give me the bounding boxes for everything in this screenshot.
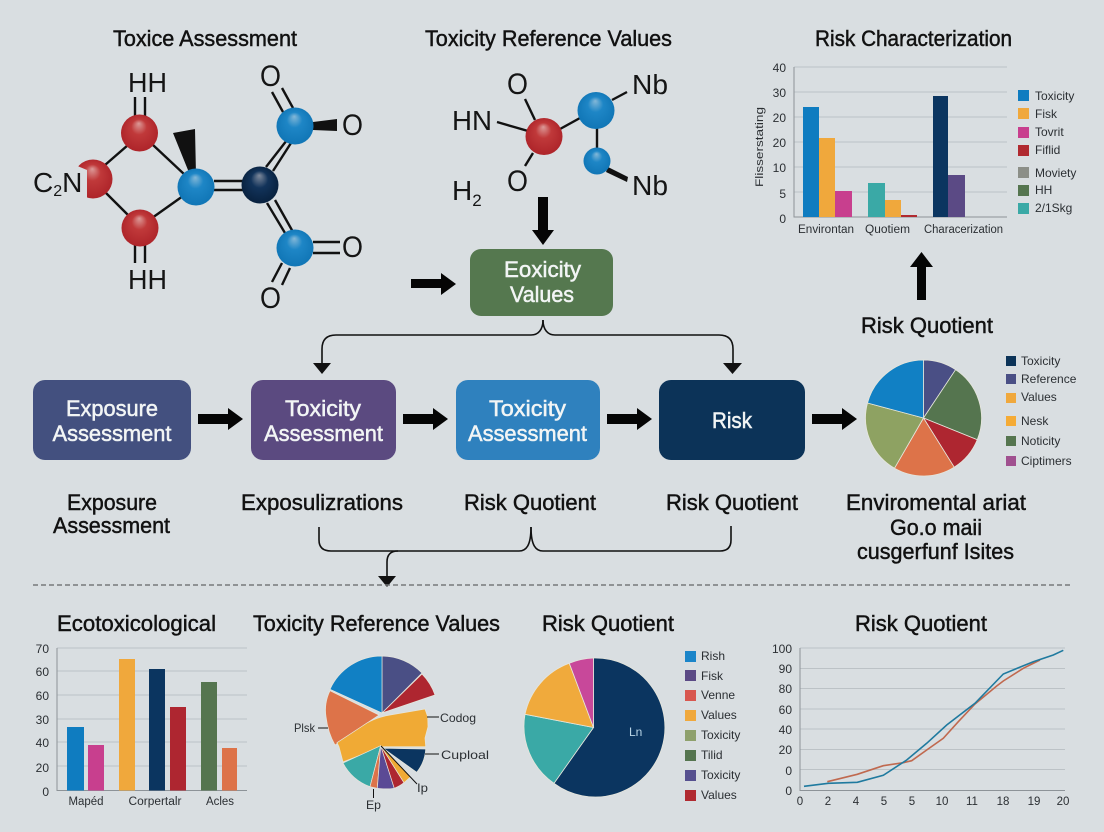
legend: Tovrit xyxy=(1035,125,1064,139)
label: Risk Quotient right: Risk Quotient xyxy=(666,490,798,515)
atom labels: O xyxy=(342,109,363,142)
arrow: into toxicity values xyxy=(411,273,456,295)
x axis labels: 5 xyxy=(909,796,915,808)
atom labels: O xyxy=(260,282,281,315)
x axis labels: 10 xyxy=(936,796,948,808)
label: Environmental sites: Go.o maii xyxy=(890,515,982,540)
y axis labels xyxy=(773,61,786,226)
box: Toxicity Values xyxy=(470,249,613,316)
legend xyxy=(1018,89,1076,215)
x axis labels: Mapéd xyxy=(68,796,104,808)
atom labels: 2 xyxy=(472,191,482,210)
heading: Toxice Assessment: Toxice Assessment xyxy=(113,26,297,51)
box: Toxicity Assessment blue: Toxicity xyxy=(489,396,566,421)
leader lines xyxy=(318,717,439,798)
y axis labels: 40 xyxy=(36,736,49,750)
connector: toxicity values to assessment and risk xyxy=(313,320,742,374)
legend: Ciptimers xyxy=(1021,454,1072,468)
arrow: toxicity to assessment xyxy=(403,408,448,430)
pie slices xyxy=(866,360,982,476)
arrow: up to bar chart xyxy=(910,252,933,300)
y axis labels: 0 xyxy=(785,764,792,778)
y axis labels: 60 xyxy=(779,703,792,717)
y axis labels: 90 xyxy=(779,662,792,676)
slice labels: Codog xyxy=(440,711,476,725)
box: Risk: Risk xyxy=(712,408,753,433)
box: Toxicity Values: Eoxicity xyxy=(504,257,581,282)
y axis labels: 20 xyxy=(773,136,786,150)
y axis labels: 40 xyxy=(779,723,792,737)
legend: 2/1Skg xyxy=(1035,201,1072,215)
x axis labels xyxy=(68,796,234,808)
box: Exposure Assessment: Exposure xyxy=(66,396,158,421)
arrow: molecule to toxicity values xyxy=(532,197,554,245)
red series xyxy=(827,660,1040,782)
slices xyxy=(524,658,665,797)
label: Exposure Assessment xyxy=(53,490,170,538)
heading: Risk Characterization: Risk Characterization xyxy=(815,26,1012,51)
atom labels: 2 xyxy=(53,183,62,200)
y axis labels: 10 xyxy=(773,161,786,175)
legend: Rish xyxy=(701,649,725,663)
atom labels: HN xyxy=(452,105,492,136)
atom labels: HH xyxy=(128,67,167,98)
box: Exposure Assessment xyxy=(33,380,191,460)
atom labels: N xyxy=(62,167,82,198)
atom labels: H xyxy=(452,175,472,206)
atom labels: O xyxy=(507,68,528,101)
arrow: risk to pie xyxy=(812,408,857,430)
axes xyxy=(794,67,1007,217)
legend: Values xyxy=(701,788,737,802)
label: Environmental sites xyxy=(846,490,1026,564)
label: Exposure Assessment: Assessment xyxy=(53,513,170,538)
connector: lower bracket xyxy=(319,526,731,587)
y axis labels: 30 xyxy=(773,86,786,100)
pie chart: right xyxy=(866,354,1077,476)
box: Toxicity Assessment purple: Assessment xyxy=(264,421,383,446)
molecule diagram left xyxy=(33,60,363,315)
slice labels: Cuploal xyxy=(441,748,489,762)
axes xyxy=(800,648,1065,790)
legend: Toxicity xyxy=(701,768,740,782)
heading: Risk Quotient lower centre: Risk Quotient xyxy=(542,611,674,636)
x axis labels: 2 xyxy=(825,796,831,808)
divider xyxy=(33,584,1071,586)
axes xyxy=(57,648,247,790)
arrow: assessment to risk xyxy=(607,408,652,430)
x axis labels: Quotiem xyxy=(865,224,910,236)
x axis labels: Acles xyxy=(206,796,234,808)
box: Exposure Assessment: Assessment xyxy=(52,421,172,446)
legend: Nesk xyxy=(1021,414,1049,428)
legend: Moviety xyxy=(1035,166,1076,180)
slice labels: Ep xyxy=(366,798,381,812)
box: Toxicity Assessment purple xyxy=(251,380,396,460)
legend: Tilid xyxy=(701,748,723,762)
x axis labels: 20 xyxy=(1057,796,1069,808)
atom labels xyxy=(33,60,363,315)
legend xyxy=(1006,354,1077,468)
arrow: exposure to toxicity xyxy=(198,408,243,430)
molecule diagram centre xyxy=(452,68,668,210)
atom labels: HH xyxy=(128,264,167,295)
legend: Toxicity xyxy=(1035,89,1074,103)
y axis labels: 0 xyxy=(779,212,786,226)
label: Risk Quotient upper right: Risk Quotient xyxy=(861,313,993,338)
atom labels: O xyxy=(507,165,528,198)
legend: Reference xyxy=(1021,372,1077,386)
y axis title: Flisserstating xyxy=(754,107,766,187)
heading: Ecotoxicological: Ecotoxicological xyxy=(57,611,216,636)
atom labels: Nb xyxy=(632,170,668,201)
heading: Toxicity Reference Values: Toxicity Reference Values xyxy=(425,26,672,51)
y axis labels: 20 xyxy=(779,743,792,757)
bars xyxy=(67,659,237,790)
x axis labels: 0 xyxy=(797,796,803,808)
box: Toxicity Assessment blue xyxy=(456,380,600,460)
box: Toxicity Assessment purple: Toxicity xyxy=(285,396,361,421)
y axis labels: 20 xyxy=(773,111,786,125)
grid lines xyxy=(57,648,247,766)
legend: HH xyxy=(1035,183,1052,197)
x axis labels: Environtan xyxy=(798,224,854,236)
label: Risk Quotient centre: Risk Quotient xyxy=(464,490,596,515)
y axis labels: 20 xyxy=(36,761,49,775)
y axis labels: 60 xyxy=(36,665,49,679)
box: Risk xyxy=(659,380,805,460)
heading: Toxicity Reference Values lower: Toxicity Reference Values xyxy=(253,611,500,636)
x axis labels xyxy=(797,796,1069,808)
atom labels: O xyxy=(342,231,363,264)
y axis labels: 0 xyxy=(785,784,792,798)
legend xyxy=(685,649,740,802)
pie chart: exploded toxicity reference values xyxy=(294,656,489,812)
legend: Toxicity xyxy=(1021,354,1060,368)
y axis labels: 40 xyxy=(773,61,786,75)
legend: Toxicity xyxy=(701,728,740,742)
y axis labels: 30 xyxy=(36,713,49,727)
pie chart: risk quotient xyxy=(524,649,740,802)
y axis labels xyxy=(36,642,49,799)
y axis labels: 5 xyxy=(779,187,786,201)
box: Toxicity Values: Values xyxy=(510,282,574,307)
x axis labels: 11 xyxy=(966,796,978,808)
bar chart: top right xyxy=(754,61,1076,236)
legend: Fisk xyxy=(1035,107,1058,121)
label: Exposure Assessment: Exposure xyxy=(67,490,157,515)
legend: Values xyxy=(701,708,737,722)
y axis labels xyxy=(772,642,792,798)
y axis labels: 60 xyxy=(36,689,49,703)
bonds xyxy=(497,92,627,166)
slice labels: Plsk xyxy=(294,721,316,735)
label patch on red atom xyxy=(60,158,87,202)
grid lines xyxy=(794,67,1007,192)
y axis labels: 0 xyxy=(42,785,49,799)
legend: Fisk xyxy=(701,669,724,683)
bars xyxy=(803,96,965,217)
y axis labels: 70 xyxy=(36,642,49,656)
box: Toxicity Assessment blue: Assessment xyxy=(468,421,587,446)
x axis labels: 19 xyxy=(1028,796,1040,808)
slices xyxy=(326,656,435,789)
legend: Venne xyxy=(701,688,735,702)
label: Environmental sites: Enviromental ariat xyxy=(846,490,1026,515)
atoms xyxy=(74,108,314,266)
atom labels xyxy=(452,68,668,210)
x axis labels: Characerization xyxy=(924,224,1003,236)
heading: Risk Quotient lower right: Risk Quotient xyxy=(855,611,987,636)
y axis labels: 80 xyxy=(779,682,792,696)
x axis labels xyxy=(798,224,1003,236)
atoms xyxy=(526,92,614,174)
slice labels xyxy=(294,711,489,812)
label: Exposulizrations: Exposulizrations xyxy=(241,490,403,515)
atom labels: O xyxy=(260,60,281,93)
bar chart: ecotoxicological xyxy=(36,642,247,808)
x axis labels: 5 xyxy=(881,796,887,808)
y axis labels: 100 xyxy=(772,642,792,656)
wedge bonds xyxy=(173,119,337,175)
legend: Fiflid xyxy=(1035,143,1060,157)
grid lines xyxy=(800,648,1065,770)
legend: Noticity xyxy=(1021,434,1060,448)
bonds xyxy=(105,88,340,285)
slice label: Ln xyxy=(629,725,642,739)
slice labels: Ip xyxy=(417,781,428,795)
wedge bond xyxy=(606,167,628,182)
legend: Values xyxy=(1021,390,1057,404)
atom labels: Nb xyxy=(632,69,668,100)
x axis labels: 18 xyxy=(997,796,1009,808)
line chart: risk quotient xyxy=(772,642,1069,808)
blue series xyxy=(804,650,1063,786)
x axis labels: Corpertalr xyxy=(128,796,182,808)
x axis labels: 4 xyxy=(853,796,860,808)
atom labels: C xyxy=(33,167,53,198)
label: Environmental sites: cusgerfunf Isites xyxy=(857,539,1014,564)
